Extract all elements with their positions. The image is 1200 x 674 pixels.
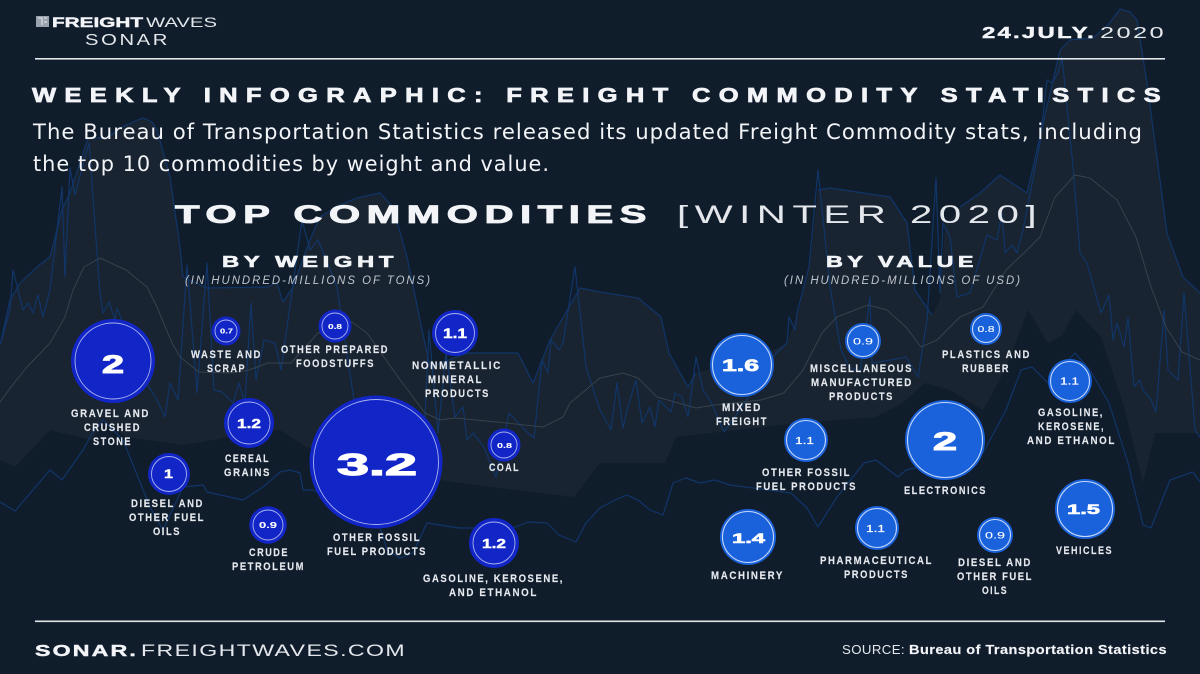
bubble: diesel and other fuel oils: 0.9 — [985, 530, 1005, 542]
header: FreightWaves SONAR logo: FREIGHT — [52, 14, 144, 30]
heading: by value: BY VALUE — [826, 254, 978, 271]
intro text: The Bureau of Transportation Statistics released its updated Freight Commodity stats, including — [32, 120, 1143, 144]
chart heading: [WINTER 2020] — [677, 201, 1043, 229]
bubble: electronics: ELECTRONICS — [904, 485, 987, 497]
bubble: other fossil fuel products — [310, 396, 442, 558]
heading: by value — [784, 254, 1022, 287]
bubble: gravel and crushed stone — [71, 319, 155, 448]
panel: by value — [710, 254, 1116, 597]
bubble: other fossil fuel products: OTHER FOSSIL — [762, 467, 851, 479]
bubble: electronics — [904, 400, 987, 497]
title: WEEKLY INFOGRAPHIC: FREIGHT COMMODITY STATISTICS — [32, 85, 1169, 107]
bubble: nonmetallic mineral products — [412, 310, 502, 400]
heading: by value: (IN HUNDRED-MILLIONS OF USD) — [784, 275, 1022, 287]
bubble: other prepared foodstuffs: FOODSTUFFS — [296, 358, 375, 370]
bubble: pharmaceutical products: PHARMACEUTICAL — [820, 555, 933, 567]
bubble: machinery — [711, 509, 784, 582]
bubble: nonmetallic mineral products: PRODUCTS — [425, 388, 490, 400]
bubble: machinery: MACHINERY — [711, 570, 784, 582]
header: FreightWaves SONAR logo: WAVES — [146, 14, 217, 30]
bubble: nonmetallic mineral products: 1.1 — [443, 325, 467, 341]
bubble: plastics and rubber: 0.8 — [978, 324, 995, 334]
date: 2020 — [1100, 25, 1166, 42]
bubble: miscellaneous manufactured products: PRODUCTS — [829, 391, 894, 403]
bubble: gravel and crushed stone: CRUSHED — [84, 422, 141, 434]
date — [982, 25, 1166, 42]
bubble: mixed freight: 1.6 — [722, 356, 759, 375]
bubble: mixed freight — [710, 333, 774, 428]
bubble: other prepared foodstuffs: 0.8 — [328, 322, 342, 331]
bubble: diesel and other fuel oils — [957, 517, 1033, 597]
bubble: other fossil fuel products: OTHER FOSSIL — [333, 532, 421, 544]
bubble: waste and scrap: SCRAP — [207, 363, 246, 375]
bubble: plastics and rubber: PLASTICS AND — [942, 349, 1031, 361]
bubble: cereal grains — [224, 398, 274, 479]
panel: by weight — [71, 254, 564, 599]
bubble: nonmetallic mineral products: NONMETALLIC — [412, 360, 502, 372]
bubble: gravel and crushed stone: STONE — [93, 436, 132, 448]
bubble: diesel and other fuel oils: DIESEL AND — [958, 557, 1032, 569]
bubble: waste and scrap: WASTE AND — [191, 349, 262, 361]
intro text — [32, 120, 1143, 176]
bubble: gravel and crushed stone: GRAVEL AND — [71, 408, 150, 420]
bubble: gasoline, kerosene, and ethanol: 1.2 — [482, 537, 506, 551]
bubble: cereal grains: CEREAL — [225, 453, 270, 465]
bubble: coal: 0.8 — [497, 441, 512, 450]
heading: by weight — [185, 254, 432, 287]
bubble: other prepared foodstuffs: OTHER PREPARED — [281, 344, 389, 356]
bubble: cereal grains: 1.2 — [237, 417, 261, 431]
bubble: vehicles — [1055, 479, 1115, 557]
bubble: coal: COAL — [489, 462, 520, 474]
footer url — [35, 642, 406, 660]
bubble: cereal grains: GRAINS — [224, 467, 271, 479]
bubble: mixed freight: FREIGHT — [716, 416, 768, 428]
bubble: waste and scrap — [191, 316, 262, 375]
bubble: miscellaneous manufactured products: 0.9 — [853, 336, 873, 348]
heading: by weight: (IN HUNDRED-MILLIONS OF TONS) — [185, 275, 432, 287]
source credit: Bureau of Transportation Statistics — [909, 642, 1167, 657]
bubble: diesel and other fuel oils: OTHER FUEL — [129, 512, 205, 524]
bubble: miscellaneous manufactured products: MISCELLANEOUS — [810, 363, 913, 375]
bubble: diesel and other fuel oils: OILS — [153, 526, 181, 538]
bubble: crude petroleum: 0.9 — [259, 520, 277, 530]
bubble: crude petroleum — [232, 506, 305, 573]
bubble: gasoline, kerosene, and ethanol: GASOLINE, — [1038, 407, 1104, 419]
bubble: gasoline, kerosene, and ethanol: 1.1 — [1060, 376, 1080, 388]
bubble: vehicles: VEHICLES — [1056, 545, 1113, 557]
intro text: the top 10 commodities by weight and value. — [33, 152, 550, 176]
bubble: gasoline, kerosene, and ethanol — [423, 518, 564, 599]
chart heading: TOP COMMODITIES — [175, 201, 653, 229]
bubble: vehicles: 1.5 — [1067, 501, 1100, 517]
icon: logo square — [36, 16, 49, 27]
bubble: crude petroleum: CRUDE — [249, 547, 289, 559]
bubble: gasoline, kerosene, and ethanol: AND ETHANOL — [1027, 435, 1116, 447]
bubble: plastics and rubber: RUBBER — [962, 363, 1010, 375]
bubble: crude petroleum: PETROLEUM — [232, 561, 305, 573]
bubble: miscellaneous manufactured products: MANUFACTURED — [811, 377, 913, 389]
bubble: gasoline, kerosene, and ethanol — [1027, 359, 1116, 447]
bubble: gasoline, kerosene, and ethanol: AND ETHANOL — [449, 587, 538, 599]
footer url: FREIGHTWAVES.COM — [141, 642, 406, 660]
bubble: diesel and other fuel oils — [129, 453, 205, 538]
bubble: other fossil fuel products — [756, 418, 857, 493]
bubble: other fossil fuel products: 3.2 — [337, 447, 417, 482]
bubble: other fossil fuel products: FUEL PRODUCTS — [756, 481, 857, 493]
bubble: diesel and other fuel oils: OILS — [982, 585, 1008, 597]
bubble: electronics: 2 — [933, 428, 957, 456]
bubble: coal — [488, 428, 520, 474]
bubble: gasoline, kerosene, and ethanol: KEROSENE, — [1038, 421, 1105, 433]
bubble: pharmaceutical products: PRODUCTS — [844, 569, 909, 581]
bubble: gravel and crushed stone: 2 — [102, 351, 124, 379]
bubble: other fossil fuel products: 1.1 — [795, 436, 815, 447]
bubble: mixed freight: MIXED — [722, 402, 762, 414]
bubble: waste and scrap: 0.7 — [220, 328, 233, 336]
bubble: nonmetallic mineral products: MINERAL — [428, 374, 483, 386]
source credit: SOURCE: — [842, 642, 905, 657]
bubble: pharmaceutical products — [820, 506, 933, 581]
bubble: diesel and other fuel oils: OTHER FUEL — [957, 571, 1033, 583]
bubble: gasoline, kerosene, and ethanol: GASOLINE, KEROSENE, — [423, 573, 564, 585]
bubble: machinery: 1.4 — [732, 530, 765, 546]
bubble: miscellaneous manufactured products — [810, 323, 913, 403]
bubble: other prepared foodstuffs — [281, 310, 389, 370]
bubble: diesel and other fuel oils: DIESEL AND — [131, 498, 204, 510]
footer url: SONAR. — [35, 643, 138, 660]
bubble: pharmaceutical products: 1.1 — [866, 524, 886, 535]
bubble: other fossil fuel products: FUEL PRODUCTS — [327, 546, 427, 558]
chart heading — [175, 201, 1043, 229]
bubble: diesel and other fuel oils: 1 — [164, 467, 173, 481]
date: 24.JULY. — [982, 25, 1096, 42]
header: FreightWaves SONAR logo — [36, 14, 217, 49]
bubble: plastics and rubber — [942, 313, 1031, 375]
heading: by weight: BY WEIGHT — [222, 254, 398, 271]
header: FreightWaves SONAR logo: SONAR — [85, 32, 170, 49]
